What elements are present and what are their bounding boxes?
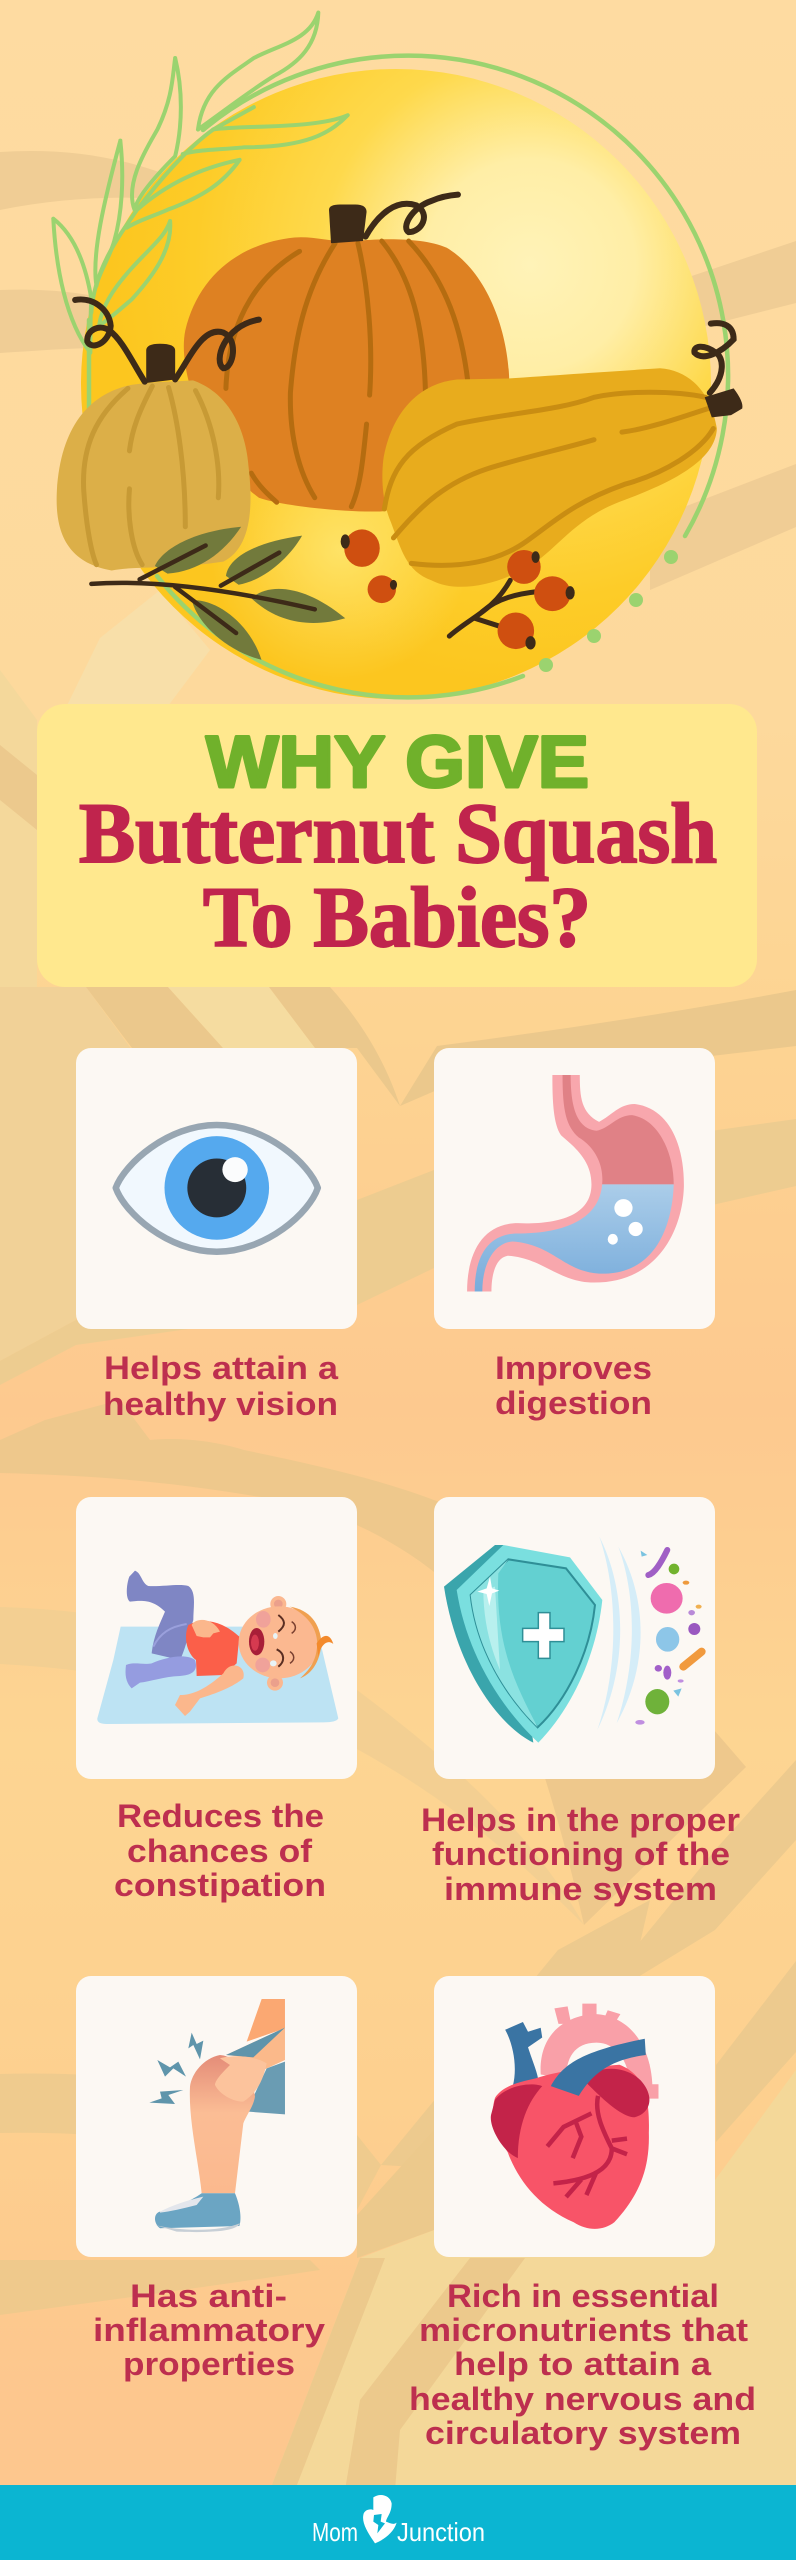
label: properties [123, 2346, 295, 2382]
icon: stomach [467, 1075, 684, 1291]
sun disc [81, 69, 711, 699]
label: circulatory system [425, 2415, 741, 2451]
card: immune system [421, 1497, 740, 1907]
logo [312, 2495, 485, 2547]
label: Improves [495, 1350, 652, 1386]
icon: eye [116, 1125, 318, 1252]
green dots [539, 550, 678, 672]
label: Rich in essential [447, 2278, 719, 2314]
label: Reduces the [117, 1798, 324, 1834]
icon: mother and child [363, 2495, 397, 2543]
label: inflammatory [93, 2312, 325, 2348]
label [93, 2278, 325, 2382]
title line: to babies: To Babies? [203, 869, 591, 965]
label: digestion [495, 1385, 652, 1421]
label [409, 2278, 756, 2451]
label: Helps attain a [104, 1350, 338, 1386]
label [495, 1350, 652, 1421]
footer bar [0, 2485, 796, 2560]
label: Has anti- [130, 2278, 287, 2314]
icon: shield with germs [444, 1537, 702, 1743]
label: help to attain a [454, 2346, 711, 2382]
card: heart and nervous system [409, 1976, 756, 2451]
card: digestion [434, 1048, 715, 1421]
label [421, 1802, 740, 1907]
label: healthy vision [103, 1386, 338, 1422]
label: healthy nervous and [409, 2381, 756, 2417]
label: Helps in the proper [421, 1802, 740, 1838]
hero illustration [53, 12, 742, 699]
logo: Junction [397, 2517, 485, 2547]
card: constipation [76, 1497, 357, 1903]
red berries [341, 529, 575, 650]
decorative green ring [89, 56, 728, 697]
butternut squash [382, 323, 742, 587]
olive leaf branch [91, 527, 345, 660]
label: chances of [127, 1833, 312, 1869]
small tan pumpkin [57, 299, 259, 570]
label [103, 1350, 338, 1422]
label: micronutrients that [419, 2312, 748, 2348]
label: immune system [444, 1871, 717, 1907]
label: functioning of the [432, 1836, 730, 1872]
card: anti-inflammatory [76, 1976, 357, 2382]
icon: heart [491, 2004, 658, 2229]
title line: why give: WHY GIVE [206, 722, 589, 803]
green leafy sprig [53, 12, 348, 353]
icon: crying baby [97, 1571, 338, 1724]
label [114, 1798, 326, 1903]
title panel [37, 704, 757, 987]
icon: sore knee [149, 1999, 285, 2232]
card: healthy vision [76, 1048, 357, 1422]
logo: Mom [312, 2517, 358, 2547]
label: constipation [114, 1867, 326, 1903]
large orange pumpkin [184, 195, 509, 512]
title line: butternut squash: Butternut Squash [79, 785, 717, 881]
